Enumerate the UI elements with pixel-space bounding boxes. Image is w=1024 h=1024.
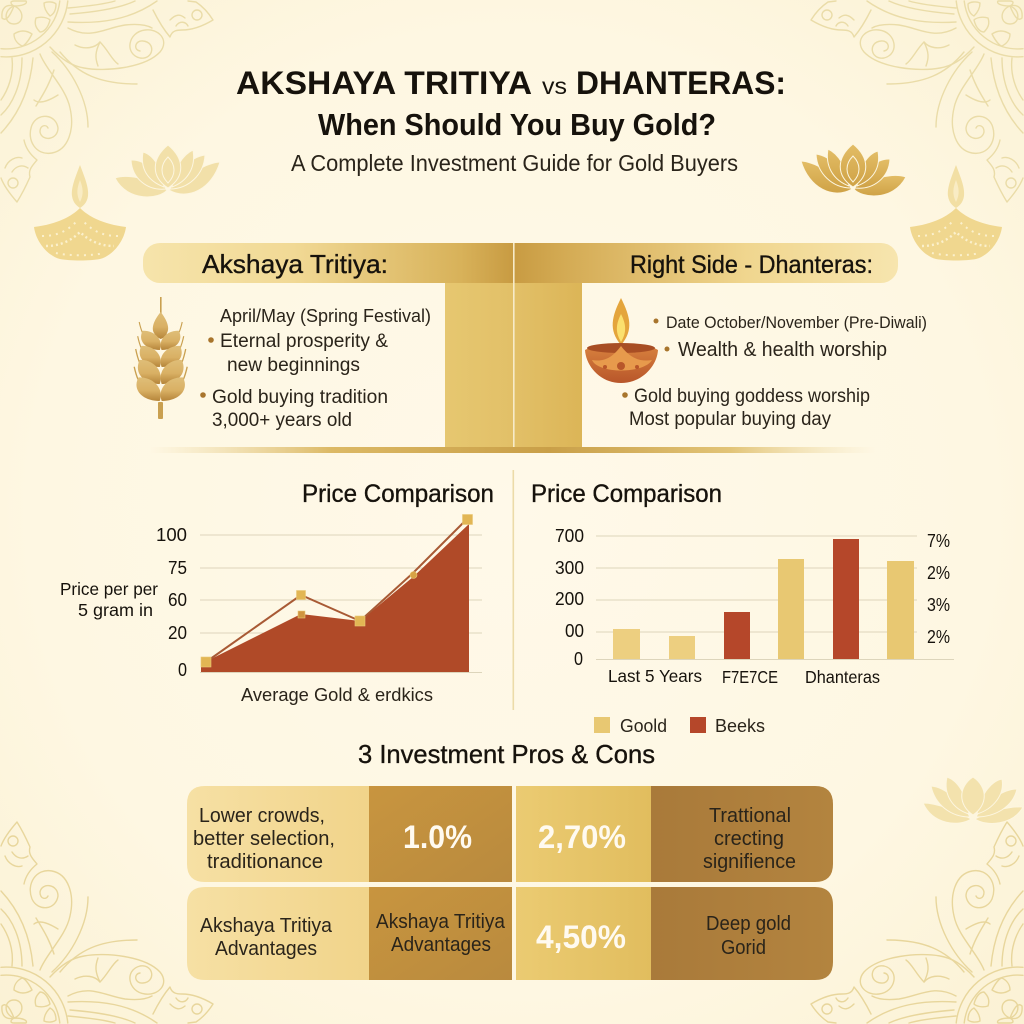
row 1: 2,70% — [538, 819, 626, 855]
y axis values — [156, 524, 187, 680]
right list: Date October/November (Pre-Diwali) — [666, 313, 927, 332]
panel: pros and cons table — [187, 786, 833, 980]
row 2: Advantages — [215, 937, 317, 960]
title line 1: vs — [542, 73, 567, 99]
left axis values: 700 — [555, 526, 584, 546]
x axis labels — [608, 666, 880, 687]
panel: festival comparison — [134, 243, 927, 453]
y axis values: 75 — [168, 557, 187, 578]
y axis values: 0 — [178, 659, 187, 680]
heading: pros and cons: 3 Investment Pros & Cons — [358, 739, 655, 769]
row 1: traditionance — [207, 850, 323, 873]
icon: clay diya — [585, 298, 658, 383]
icon: lotus left — [115, 145, 220, 197]
heading: Dhanteras: Right Side - Dhanteras: — [630, 251, 873, 279]
right list: Most popular buying day — [629, 409, 831, 430]
row 2: Advantages — [391, 933, 491, 956]
y axis values: 100 — [156, 524, 187, 545]
row 2: Gorid — [721, 936, 766, 959]
right axis values: 2% — [927, 563, 950, 583]
x axis labels: Dhanteras — [805, 667, 880, 687]
row 2: Akshaya Tritiya — [200, 914, 333, 937]
row 1: Lower crowds, — [199, 804, 325, 827]
row 2: Deep gold — [706, 912, 791, 935]
icon: diya right — [910, 165, 1002, 260]
y axis values: 60 — [168, 589, 187, 610]
decorative corner mandala: bottom right — [810, 821, 1024, 1024]
right list: Gold buying goddess worship — [634, 386, 870, 407]
x axis label: Average Gold & erdkics — [241, 684, 433, 705]
y axis label: Price per per — [60, 579, 158, 599]
row 2: 4,50% — [536, 919, 626, 955]
left list: Eternal prosperity & — [220, 331, 388, 352]
subtitle: A Complete Investment Guide for Gold Buyers — [291, 150, 738, 176]
icon: lotus right — [801, 144, 906, 196]
left list: 3,000+ years old — [212, 410, 352, 431]
markers — [201, 514, 472, 667]
legend — [594, 716, 765, 736]
title line 1: DHANTERAS: — [576, 65, 786, 101]
x axis labels: F7E7CE — [722, 667, 778, 687]
left list: new beginnings — [227, 355, 360, 376]
area series — [201, 524, 469, 672]
centre vertical divider — [512, 470, 514, 710]
left axis values: 0 — [574, 649, 583, 669]
decorative corner mandala: top right — [810, 0, 1024, 203]
y axis label: 5 gram in — [78, 600, 153, 620]
panel: bar chart — [531, 480, 954, 736]
title line 2: When Should You Buy Gold? — [318, 107, 716, 142]
row 2 — [187, 887, 833, 980]
right axis values: 7% — [927, 531, 950, 551]
title block — [236, 65, 786, 176]
decorative corner mandala: top left — [0, 0, 214, 203]
icon: lotus far right — [923, 777, 1023, 823]
left list: April/May (Spring Festival) — [220, 306, 431, 326]
row 1: better selection, — [193, 827, 335, 850]
rule under comparison — [150, 447, 875, 453]
left list — [200, 306, 431, 431]
grid lines — [200, 535, 482, 672]
icon: diya left — [34, 165, 126, 260]
legend: Goold — [620, 716, 667, 736]
panel: line chart — [60, 480, 494, 705]
right axis values — [927, 531, 950, 647]
row 1: Trattional — [709, 804, 791, 827]
right list — [622, 313, 927, 430]
right axis values: 2% — [927, 627, 950, 647]
y axis label — [60, 579, 158, 620]
title line 1: AKSHAYA TRITIYA — [236, 65, 532, 101]
right axis values: 3% — [927, 595, 950, 615]
left axis values: 300 — [555, 558, 584, 578]
header band — [143, 243, 898, 283]
row 1 — [187, 786, 833, 882]
decorative corner mandala: bottom left — [0, 821, 214, 1024]
left axis values: 200 — [555, 589, 584, 609]
y axis values: 20 — [168, 622, 187, 643]
legend: Beeks — [715, 716, 765, 736]
left axis values: 00 — [565, 621, 584, 641]
grid lines — [596, 536, 954, 660]
left list: Gold buying tradition — [212, 387, 388, 408]
heading: Price Comparison — [302, 480, 494, 508]
x axis labels: Last 5 Years — [608, 666, 702, 686]
icon: wheat — [134, 297, 187, 419]
line series — [206, 519, 467, 662]
row 1: crecting — [714, 827, 784, 850]
row 2: Akshaya Tritiya — [376, 910, 506, 933]
left axis values — [555, 526, 584, 669]
centre gold column — [445, 280, 582, 448]
right list: Wealth & health worship — [678, 339, 887, 361]
row 1: signifience — [703, 850, 796, 873]
heading: Akshaya Tritiya: Akshaya Tritiya: — [202, 249, 388, 279]
row 1: 1.0% — [403, 819, 472, 855]
title line 1 — [236, 65, 786, 101]
bars — [613, 539, 914, 659]
heading: Price Comparison — [531, 480, 722, 508]
